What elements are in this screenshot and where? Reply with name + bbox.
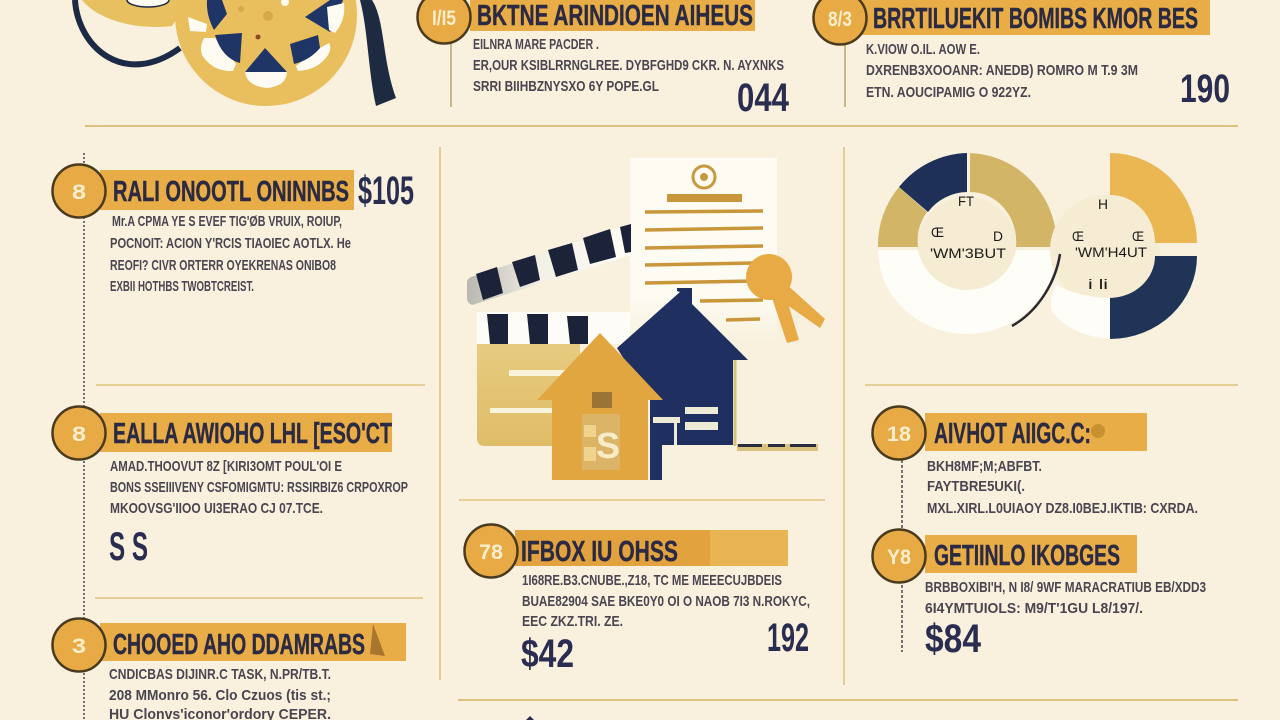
body text: 6I4YMTUIOLS: M9/T'1GU L8/197/. — [925, 600, 1143, 617]
donut chart: right — [1012, 153, 1197, 339]
heading bar: CHOOED AHO DDAMRABS — [113, 629, 365, 661]
clapperboard — [467, 224, 631, 446]
heading bar — [100, 170, 354, 210]
donut chart: left — [878, 153, 1057, 334]
number badge — [52, 406, 106, 460]
heading bar: EALLA AWIOHO LHL [ESO'CT — [113, 418, 392, 450]
number badge — [814, 0, 866, 44]
body text: FAYTBRE5UKI(. — [927, 478, 1025, 495]
body text: CNDICBAS DIJINR.C TASK, N.PR/TB.T. — [109, 666, 331, 683]
section: top middle — [418, 0, 790, 120]
heading bar: AIVHOT AIIGC.C: — [934, 418, 1091, 450]
body text: MXL.XIRL.L0UIAOY DZ8.I0BEJ.IKTIB: CXRDA. — [927, 500, 1198, 517]
centre labels: D — [993, 228, 1003, 244]
number badge: 3 — [72, 635, 86, 658]
value: $84 — [925, 617, 982, 661]
number badge: 8 — [72, 181, 86, 204]
body text — [927, 458, 1198, 517]
heading bar — [515, 530, 788, 568]
number badge — [464, 524, 518, 578]
number badge: 18 — [887, 423, 911, 446]
gold house — [537, 333, 663, 480]
centre labels: Œ — [1132, 228, 1144, 244]
curved leader line — [1012, 254, 1060, 326]
centre labels: H — [1098, 196, 1108, 212]
section: right 2 — [872, 530, 1206, 661]
segment: white — [1051, 285, 1110, 339]
body text: BKH8MF;M;ABFBT. — [927, 458, 1042, 475]
number badge — [872, 406, 926, 460]
segment: navy — [899, 153, 967, 212]
icon: film reels — [75, 0, 396, 106]
segment: khaki quadrant — [970, 153, 1057, 247]
value: 190 — [1180, 67, 1230, 111]
value: $105 — [358, 169, 414, 213]
body text: BONS SSEIIIVENY CSFOMIGMTU: RSSIRBIZ6 CRPOXROP — [110, 479, 408, 496]
body text — [110, 213, 351, 295]
navy house — [617, 288, 818, 480]
body text — [925, 579, 1206, 617]
dotted timeline: left column — [83, 153, 85, 720]
cut-off icon at bottom edge — [526, 716, 534, 720]
body text: 1I68RE.B3.CNUBE.,Z18, TC ME MEEECUJBDEIS — [522, 572, 782, 589]
body text: ER,OUR KSIBLRRNGLREE. DYBFGHD9 CKR. N. AYXNKS — [473, 57, 784, 74]
number badge — [418, 0, 470, 44]
body text: 208 MMonro 56. Clo Czuos (tis st.; — [109, 687, 331, 704]
section: left 1 — [52, 164, 414, 295]
heading bar: BKTNE ARINDIOEN AIHEUS — [477, 0, 753, 32]
vertical rule — [450, 40, 452, 107]
film ribbon — [360, 0, 396, 106]
number badge: 8 — [72, 423, 86, 446]
back reel — [82, 0, 190, 27]
segment: khaki left — [878, 187, 927, 247]
value: 044 — [737, 76, 790, 120]
dashed timeline: right column — [901, 460, 903, 652]
illustration: clapperboard, contract and houses — [467, 158, 825, 480]
body text — [522, 572, 810, 630]
body text: EXBII HOTHBS TWOBTCREIST. — [110, 278, 254, 295]
segment: white — [878, 250, 1056, 334]
centre labels: 'WM'3BUT — [930, 245, 1007, 261]
body text: EILNRA MARE PACDER . — [473, 36, 599, 53]
centre labels: i li — [1088, 276, 1108, 292]
body text: BUAE82904 SAE BKE0Y0 OI O NAOB 7I3 N.ROKYC, — [522, 593, 810, 610]
body text: MKOOVSG'IIOO UI3ERAO CJ 07.TCE. — [110, 500, 323, 517]
heading bar: IFBOX IU OHSS — [521, 536, 678, 568]
number badge: 78 — [479, 541, 503, 564]
number badge — [52, 164, 106, 218]
heading bar: RALI ONOOTL ONINNBS — [113, 176, 349, 208]
body text: DXRENB3XOOANR: ANEDB) ROMRO M T.9 3M — [866, 62, 1138, 79]
section: right 1 — [872, 406, 1198, 517]
section: top right — [814, 0, 1230, 111]
body text: K.VIOW O.IL. AOW E. — [866, 41, 980, 58]
centre labels: Œ — [931, 224, 944, 240]
number badge: I/I5 — [432, 7, 456, 30]
gold house: S — [596, 425, 620, 466]
number badge: 8/3 — [828, 8, 852, 31]
heading bar — [925, 535, 1137, 573]
body text: BRBBOXIBI'H, N I8/ 9WF MARACRATIUB EB/XDD3 — [925, 579, 1206, 596]
body text — [866, 41, 1138, 101]
section: left 2 — [52, 406, 408, 569]
vertical rule — [844, 40, 846, 107]
body text: REOFI? CIVR ORTERR OYEKRENAS ONIBO8 — [110, 257, 336, 274]
number badge — [872, 530, 926, 582]
heading bar: GETIINLO IKOBGES — [934, 540, 1120, 572]
body text — [110, 458, 408, 517]
body text: ETN. AOUCIPAMIG O 922YZ. — [866, 84, 1031, 101]
value: S S — [109, 525, 148, 569]
segment: navy — [1110, 256, 1197, 339]
section: left 3 — [52, 618, 406, 720]
segment: gold — [1110, 153, 1197, 243]
front reel — [175, 0, 357, 106]
centre labels: Œ — [1072, 228, 1084, 244]
heading bar — [100, 623, 406, 661]
body text: POCNOIT: ACION Y'RCIS TIAOIEC AOTLX. He — [110, 235, 351, 252]
centre labels — [1072, 196, 1147, 292]
number badge — [52, 618, 106, 672]
body text: SRRI BIIHBZNYSXO 6Y POPE.GL — [473, 78, 659, 95]
body text — [109, 666, 331, 720]
centre labels: FT — [958, 193, 974, 209]
film strip loop — [75, 0, 180, 64]
rosette seal — [746, 254, 825, 343]
heading bar — [100, 413, 392, 452]
centre disc — [917, 197, 1017, 297]
centre labels: 'WM'H4UT — [1075, 244, 1147, 260]
centre labels — [930, 193, 1007, 261]
body text: EEC ZKZ.TRI. ZE. — [522, 613, 623, 630]
body text — [473, 36, 784, 95]
number badge: Y8 — [887, 546, 911, 569]
value: $42 — [521, 632, 574, 676]
section: center lower — [464, 524, 810, 676]
body text: Mr.A CPMA YE S EVEF TIG'ØB VRUIX, ROIUP, — [112, 213, 342, 230]
body text: AMAD.THOOVUT 8Z [KIRI3OMT POUL'OI E — [110, 458, 342, 475]
value: 192 — [767, 616, 809, 660]
contract — [630, 158, 777, 342]
centre disc — [1050, 195, 1160, 305]
